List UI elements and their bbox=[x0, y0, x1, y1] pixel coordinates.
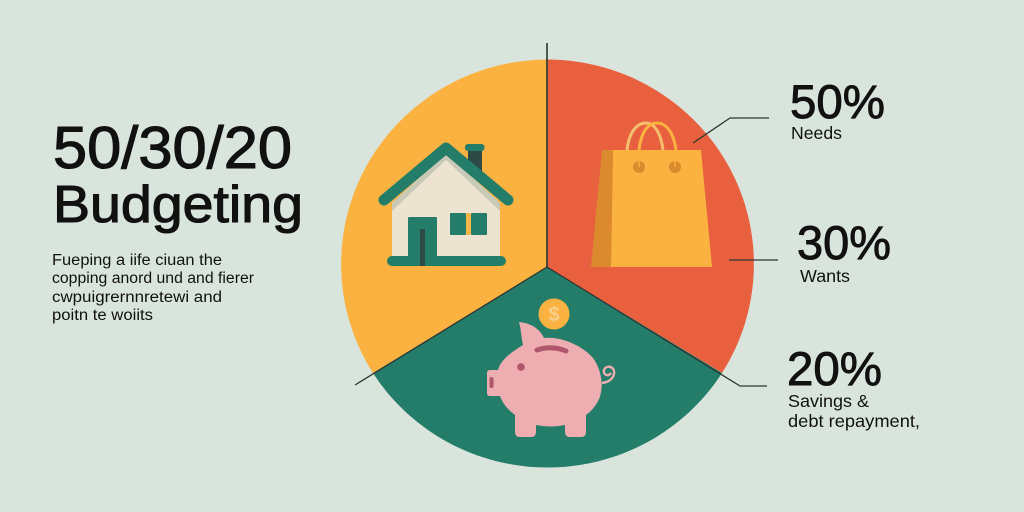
front handle bbox=[639, 123, 676, 150]
leader: needs bbox=[693, 118, 769, 143]
coin: $ bbox=[548, 304, 560, 326]
label: 50% needs: 50% bbox=[790, 75, 885, 128]
label: 20% savings: 20% bbox=[787, 342, 882, 395]
description text: Fueping a iife ciuan the bbox=[52, 252, 222, 269]
description text bbox=[52, 252, 254, 324]
title: Budgeting bbox=[53, 176, 303, 234]
bag holes bbox=[633, 161, 681, 173]
pig eye bbox=[517, 363, 525, 371]
label: 50% needs: Needs bbox=[791, 123, 842, 143]
slice: savings green bbox=[373, 267, 722, 467]
door bbox=[408, 217, 437, 259]
slice: wants red bbox=[547, 60, 754, 373]
icon: piggy bank bbox=[487, 298, 614, 437]
label: 20% savings: Savings & bbox=[788, 391, 869, 411]
label: 30% wants: Wants bbox=[800, 266, 850, 286]
label: 20% savings bbox=[787, 342, 920, 431]
bag front bbox=[611, 150, 712, 267]
pie chart bbox=[341, 43, 767, 467]
description text: poitn te woiits bbox=[52, 307, 153, 324]
divider lines bbox=[355, 43, 767, 386]
pig body bbox=[487, 322, 602, 437]
window bbox=[450, 213, 487, 235]
chimney bbox=[465, 144, 484, 174]
label: 30% wants: 30% bbox=[797, 216, 891, 269]
title bbox=[53, 115, 303, 234]
roof bbox=[384, 148, 508, 200]
base bbox=[387, 256, 506, 266]
title: 50/30/20 bbox=[53, 115, 292, 181]
icon: shopping bag bbox=[591, 123, 712, 267]
icon: house bbox=[384, 144, 508, 266]
door slit bbox=[420, 229, 425, 266]
leader: wants bbox=[729, 259, 778, 261]
label: 20% savings: debt repayment, bbox=[788, 411, 920, 431]
description text: copping anord und and fierer bbox=[52, 270, 254, 287]
description text: cwpuigrernnretewi and bbox=[52, 289, 222, 306]
pig nostril bbox=[490, 377, 494, 388]
house body bbox=[392, 153, 500, 258]
slice: needs yellow bbox=[341, 60, 547, 373]
back handle bbox=[627, 123, 663, 150]
pig slot bbox=[537, 348, 566, 351]
bag side bbox=[591, 150, 613, 267]
pig tail bbox=[602, 367, 614, 383]
